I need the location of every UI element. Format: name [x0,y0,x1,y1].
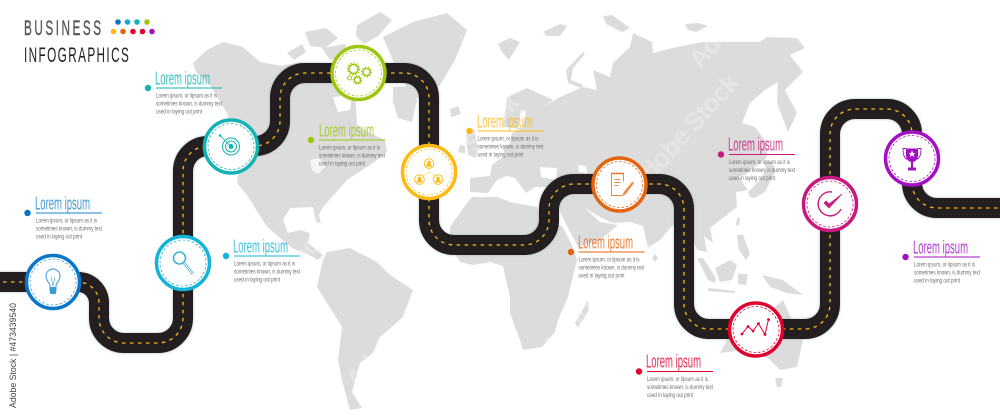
label 9: Lorem ipsum, or lipsum as it is [914,262,975,268]
label 5: used in laying out print [478,152,524,158]
watermark: Adobe Stock [535,229,658,361]
label 3: used in laying out print [156,108,202,116]
label 7 [636,352,713,399]
label 8: sometimes known, is dummy text [729,167,795,174]
label 4 [308,120,385,168]
label 4: Lorem ipsum [319,120,374,140]
road [0,73,1000,343]
marker 9: trophy [886,132,938,185]
label 1: Lorem ipsum, or lipsum as it is [36,218,97,224]
label 7: Lorem ipsum, or lipsum as it is [647,376,708,383]
marker 2: magnifier [156,236,210,290]
label 5 [466,112,544,158]
label 9 [902,238,980,284]
label 8: Lorem ipsum, or lipsum as it is [729,159,790,166]
label 7: Lorem ipsum [646,352,701,372]
watermark: Adobe Stock [212,219,335,351]
label 1: sometimes known, is dummy text [36,226,102,232]
label 3: Lorem ipsum [155,68,210,88]
label 6: Lorem ipsum, or lipsum as it is [578,256,640,264]
marker 7: line chart [730,303,782,356]
watermark: Adobe Stock [622,67,745,199]
marker 4: gears [332,46,385,100]
label 2: Lorem ipsum, or lipsum as it is [234,260,295,268]
label 6: Lorem ipsum [578,232,633,252]
label 2 [223,236,300,284]
watermark: Adobe Stock [402,87,525,219]
label 7: sometimes known, is dummy text [647,384,713,391]
watermark: Adobe Stock [832,107,955,239]
label 9: used in laying out print [914,278,960,284]
label 5: Lorem ipsum, or lipsum as it is [478,136,538,142]
label 5: Lorem ipsum [477,112,532,132]
label 8 [718,134,795,182]
marker 8: check mark [804,178,856,230]
marker 5: team [402,146,456,198]
label 2: Lorem ipsum [233,236,288,256]
label 3 [145,68,222,116]
stock credit: Adobe Stock | #473439540 [8,303,19,408]
title dots [111,19,155,34]
label 3: Lorem ipsum, or lipsum as it is [156,92,217,100]
label 2: sometimes known, is dummy text [234,268,300,276]
label 4: sometimes known, is dummy text [319,152,385,160]
title: BUSINESS [24,16,104,40]
marker 3: target [204,120,258,173]
marker 1: lightbulb [26,256,80,308]
label 4: Lorem ipsum, or lipsum as it is [319,144,380,152]
label 6: sometimes known, is dummy text [578,264,645,272]
title [24,16,130,67]
watermark: Adobe Stock [35,49,158,181]
label 1: used in laying out print [36,234,82,240]
label 6: used in laying out print [578,272,625,280]
label 2: used in laying out print [234,276,280,284]
label 1 [24,194,102,240]
label 8: used in laying out print [729,175,775,182]
label 6 [568,232,645,280]
label 1: Lorem ipsum [35,194,90,214]
world map [193,12,805,410]
label 3: sometimes known, is dummy text [156,100,222,108]
label 5: sometimes known, is dummy text [478,144,544,150]
label 4: used in laying out print [319,160,365,168]
watermark: Adobe Stock [339,262,462,394]
marker 6: notepad [593,158,646,211]
label 8: Lorem ipsum [728,134,783,154]
title: INFOGRAPHICS [24,43,130,67]
label 7: used in laying out print [647,392,693,399]
